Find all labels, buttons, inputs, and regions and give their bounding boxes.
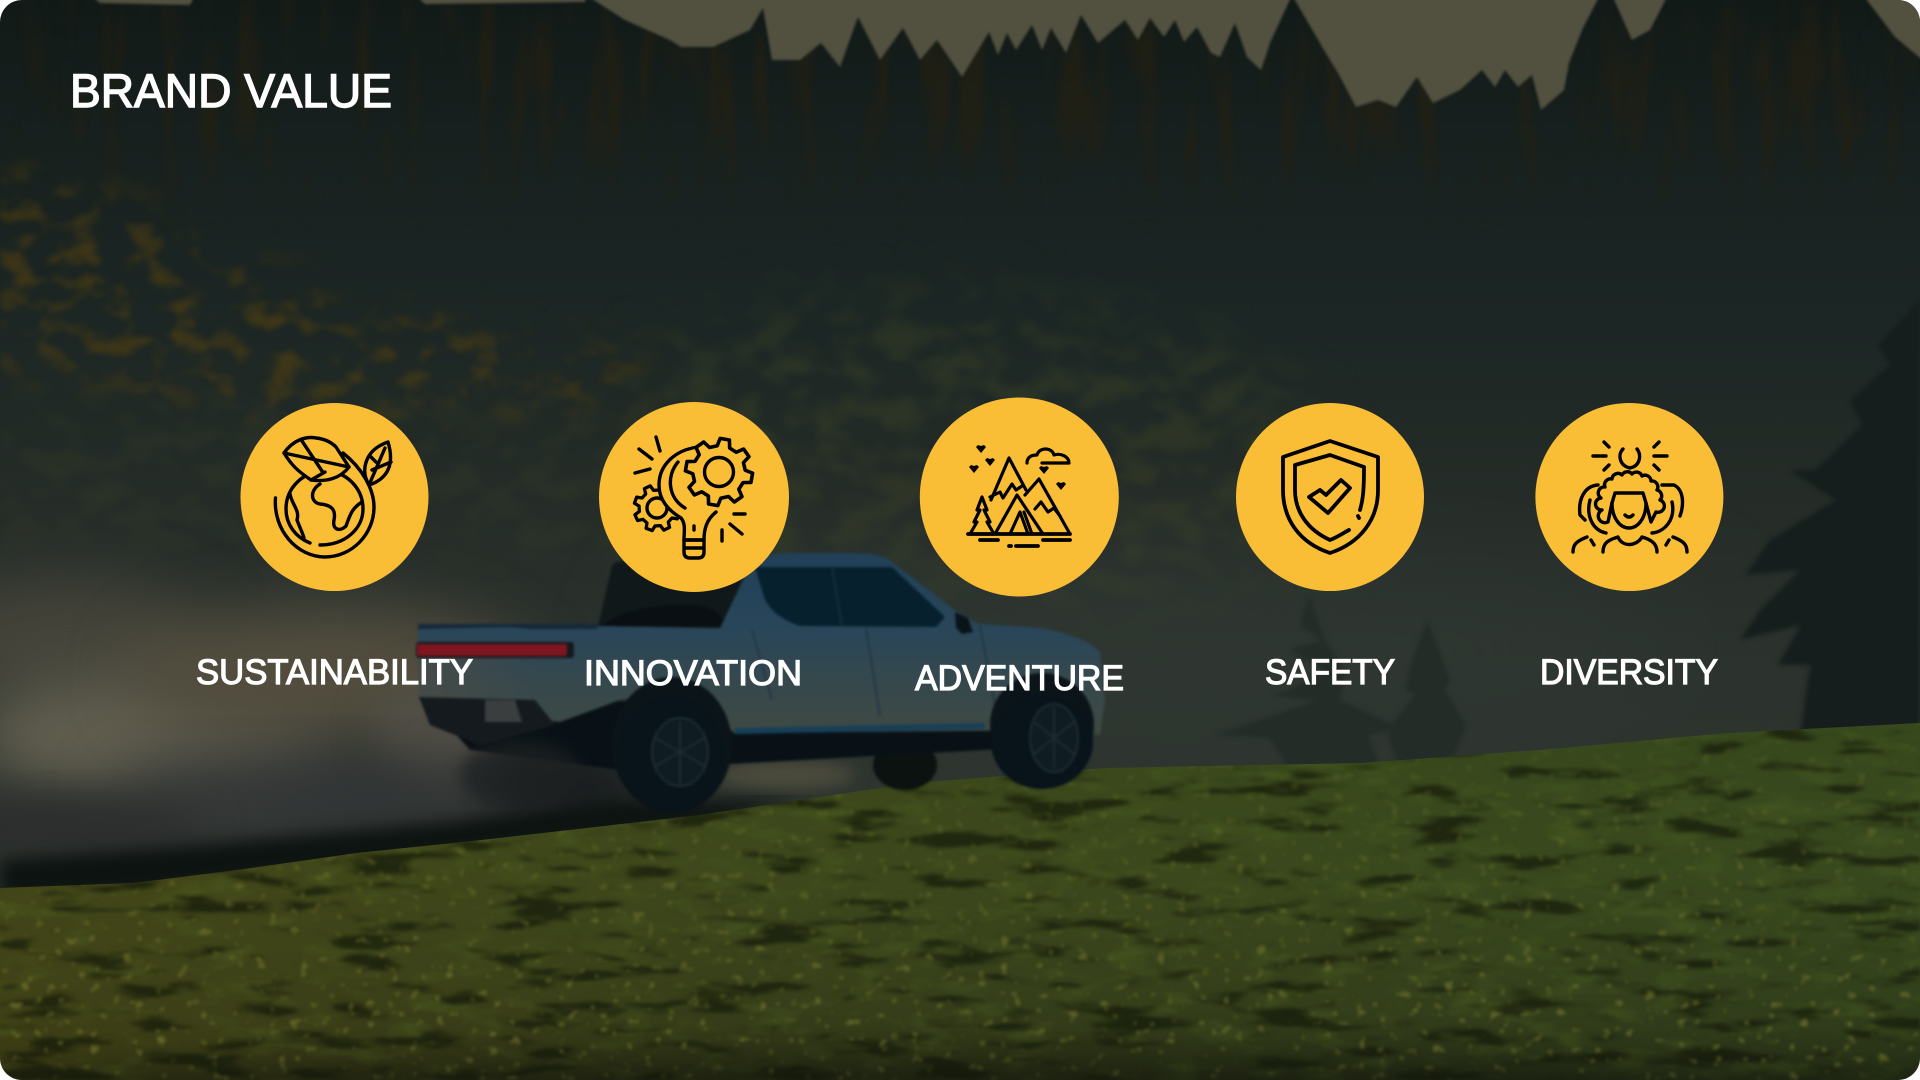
door seams (752, 626, 998, 720)
label: adventure: ADVENTURE (915, 659, 1124, 698)
icon: shield with check (1283, 441, 1378, 553)
label: safety: SAFETY (1265, 653, 1395, 692)
front wheel spokes (1034, 708, 1074, 768)
value: diversity (1535, 403, 1723, 591)
rear wheel spokes (655, 722, 705, 784)
brown tree trunks in upper forest (206, 23, 1850, 130)
bed opening (598, 561, 760, 628)
rear panel haze (418, 658, 488, 697)
value: safety (1236, 403, 1424, 591)
icon: mountains and tent (968, 449, 1070, 546)
dust over rear wheel (460, 741, 580, 809)
icon: earth with leaves (275, 438, 391, 557)
mist band (660, 560, 1700, 740)
circle badge (1236, 403, 1424, 591)
value: sustainability (240, 403, 428, 591)
value: innovation (599, 402, 789, 592)
far wheel (872, 752, 938, 791)
sky above treeline (586, 0, 1600, 110)
bed rail (418, 624, 598, 629)
window pillar (832, 567, 842, 626)
circle badge (920, 398, 1119, 596)
tail light (416, 642, 574, 658)
front wheel arch (990, 673, 1094, 777)
rear wheel arch (612, 677, 732, 813)
cab windows (755, 567, 945, 627)
circle badge (240, 403, 428, 591)
value: adventure (920, 398, 1119, 596)
right foreground tree (1740, 300, 1920, 735)
meadow (0, 700, 1920, 1080)
small trees behind meadow (1228, 604, 1390, 764)
rear bumper (419, 697, 555, 745)
label: sustainability: SUSTAINABILITY (196, 653, 473, 692)
icon: light bulb with gears (628, 433, 758, 558)
label: innovation: INNOVATION (584, 654, 802, 693)
sill (735, 723, 985, 734)
title: BRAND VALUE (70, 64, 392, 117)
label: diversity: DIVERSITY (1540, 653, 1718, 692)
mirror (955, 612, 973, 634)
underbody (458, 700, 992, 770)
bottom vignette (0, 1060, 1920, 1080)
dust cloud (0, 564, 628, 812)
pickup truck (416, 553, 1105, 813)
circle badge (599, 402, 789, 592)
icon hearts (969, 445, 1066, 490)
circle badge (1535, 403, 1723, 591)
light dust under truck (715, 761, 855, 789)
lit hillside center (671, 320, 1255, 524)
front wheel (991, 695, 1093, 789)
icon: group of people under sun (1573, 442, 1687, 552)
lit hillside left (0, 160, 640, 420)
body (418, 553, 1105, 735)
rear wheel (618, 697, 724, 813)
